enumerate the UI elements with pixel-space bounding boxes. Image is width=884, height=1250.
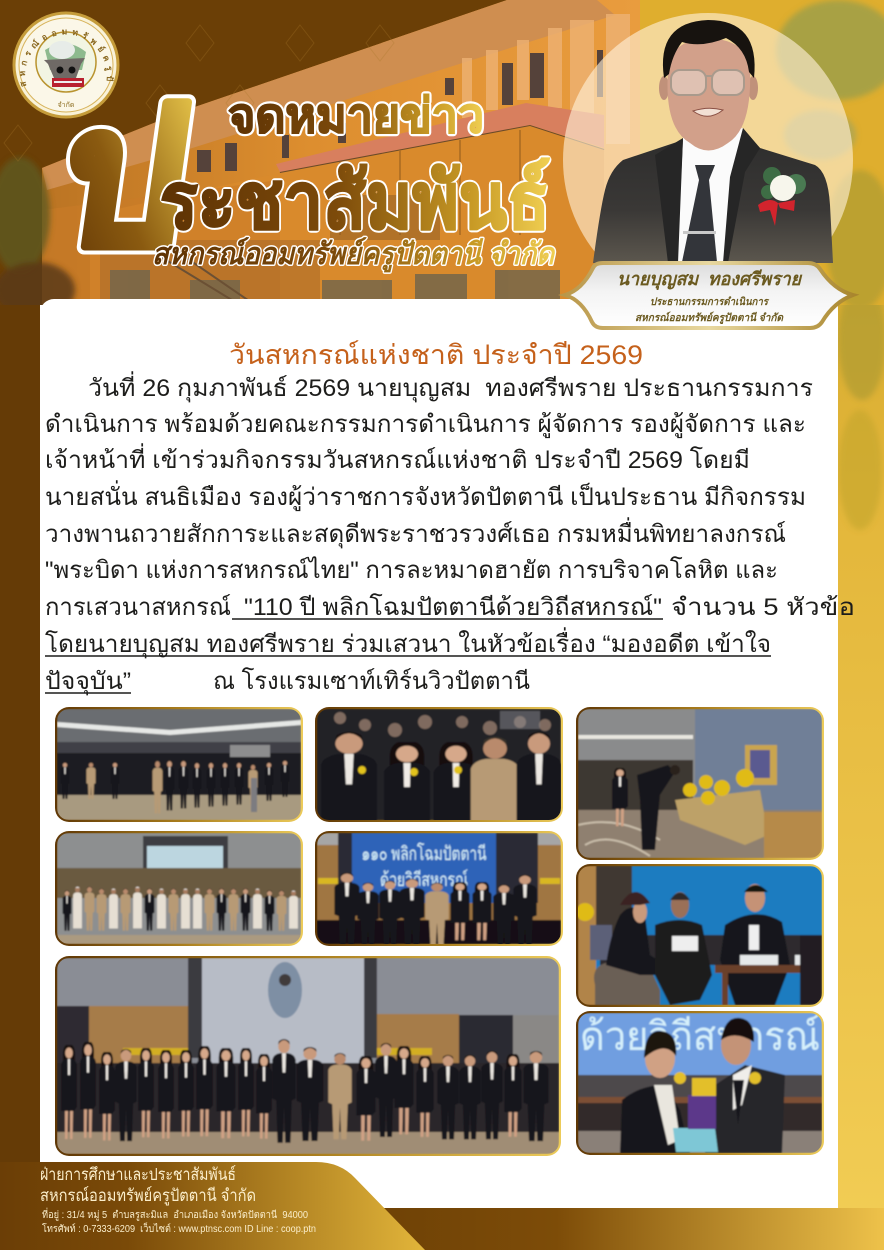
title: public relations: ระชาสัมพันธ์ <box>160 157 550 245</box>
article body: ณ โรงแรมเซาท์เทิร์นวิวปัตตานี <box>213 667 530 695</box>
pale circle behind portrait <box>563 13 853 252</box>
photo: raised-fist pledge <box>315 707 563 822</box>
article body: การเสวนาสหกรณ์ <box>45 593 231 621</box>
title: public relations: ระชาสัมพันธ์ <box>160 157 550 245</box>
article body: "พระบิดา แห่งการสหกรณ์ไทย" การละหมาดฮายัต การบริจาคโลหิต และ <box>45 556 778 584</box>
title: newsletter: จดหมายข่าว <box>228 90 484 143</box>
footer text <box>40 1165 316 1235</box>
header banner <box>0 0 884 318</box>
article body: จำนวน 5 หัวข้อ <box>671 594 855 621</box>
article body: ปัจจุบัน” <box>45 668 131 696</box>
article body: "110 ปี พลิกโฉมปัตตานีด้วยวิถีสหกรณ์" <box>244 593 662 621</box>
photo: group with white robes <box>55 831 303 946</box>
name plate: ประธานกรรมการดำเนินการ <box>650 296 770 308</box>
footer bands <box>0 1162 884 1250</box>
title: big letter: ป <box>50 72 200 284</box>
footer text: ฝ่ายการศึกษาและประชาสัมพันธ์ <box>40 1165 236 1184</box>
article body: ดำเนินการ พร้อมด้วยคณะกรรมการดำเนินการ ผู้จัดการ รองผู้จัดการ และ <box>45 411 806 439</box>
name plate <box>565 263 853 328</box>
footer text: โทรศัพท์ : 0-7333-6209 เว็บไซต์ : www.ptnsc.com ID Line : coop.ptn <box>42 1221 316 1235</box>
subtitle: cooperative name: สหกรณ์ออมทรัพย์ครูปัตตานี จำกัด <box>152 237 555 273</box>
title: big letter: ป <box>50 72 200 284</box>
photo: gift presentation <box>576 1011 824 1155</box>
photo: panel discussion <box>576 864 824 1007</box>
building <box>42 0 640 305</box>
article body: นายสนั่น สนธิเมือง รองผู้ว่าราชการจังหวัดปัตตานี เป็นประธาน มีกิจกรรม <box>45 480 806 512</box>
photo: gift presentation: ด้วยวิถีสหกรณ์ <box>580 1014 820 1059</box>
photo: hall assembly <box>55 707 303 822</box>
footer text: สหกรณ์ออมทรัพย์ครูปัตตานี จำกัด <box>40 1186 256 1206</box>
photo: large staff group <box>55 956 561 1156</box>
faint pattern <box>4 25 394 161</box>
article body <box>45 371 855 696</box>
portrait: chairman <box>593 20 833 263</box>
title: newsletter: จดหมายข่าว <box>228 90 484 143</box>
icon: cooperative logo: จำกัด <box>58 101 74 109</box>
photo: group before blue screen <box>315 831 563 946</box>
name plate: สหกรณ์ออมทรัพย์ครูปัตตานี จำกัด <box>635 311 784 324</box>
article heading: วันสหกรณ์แห่งชาติ ประจำปี 2569 <box>229 339 643 370</box>
article body: เจ้าหน้าที่ เข้าร่วมกิจกรรมวันสหกรณ์แห่งชาติ ประจำปี 2569 โดยมี <box>45 443 750 474</box>
photo: offering ceremony <box>576 707 824 860</box>
photo: group before blue screen: ๑๑๐ พลิกโฉมปัตตานี <box>362 842 486 865</box>
article body: วันที่ 26 กุมภาพันธ์ 2569 นายบุญสม ทองศรีพราย ประธานกรรมการ <box>88 371 813 403</box>
trees <box>0 0 884 318</box>
article body: วางพานถวายสักการะและสดุดีพระราชวรวงศ์เธอ กรมหมื่นพิทยาลงกรณ์ <box>45 517 786 549</box>
name plate: นายบุญสม ทองศรีพราย <box>617 269 802 291</box>
content card <box>40 299 838 1208</box>
icon: cooperative logo <box>12 12 120 118</box>
footer text: ที่อยู่ : 31/4 หมู่ 5 ตำบลรูสะมิแล อำเภอเมือง จังหวัดปัตตานี 94000 <box>42 1207 308 1221</box>
article body: โดยนายบุญสม ทองศรีพราย ร่วมเสวนา ในหัวข้อเรื่อง “มองอดีต เข้าใจ <box>45 627 771 659</box>
photo: group before blue screen: ด้วยวิถีสหกรณ์ <box>380 869 468 891</box>
